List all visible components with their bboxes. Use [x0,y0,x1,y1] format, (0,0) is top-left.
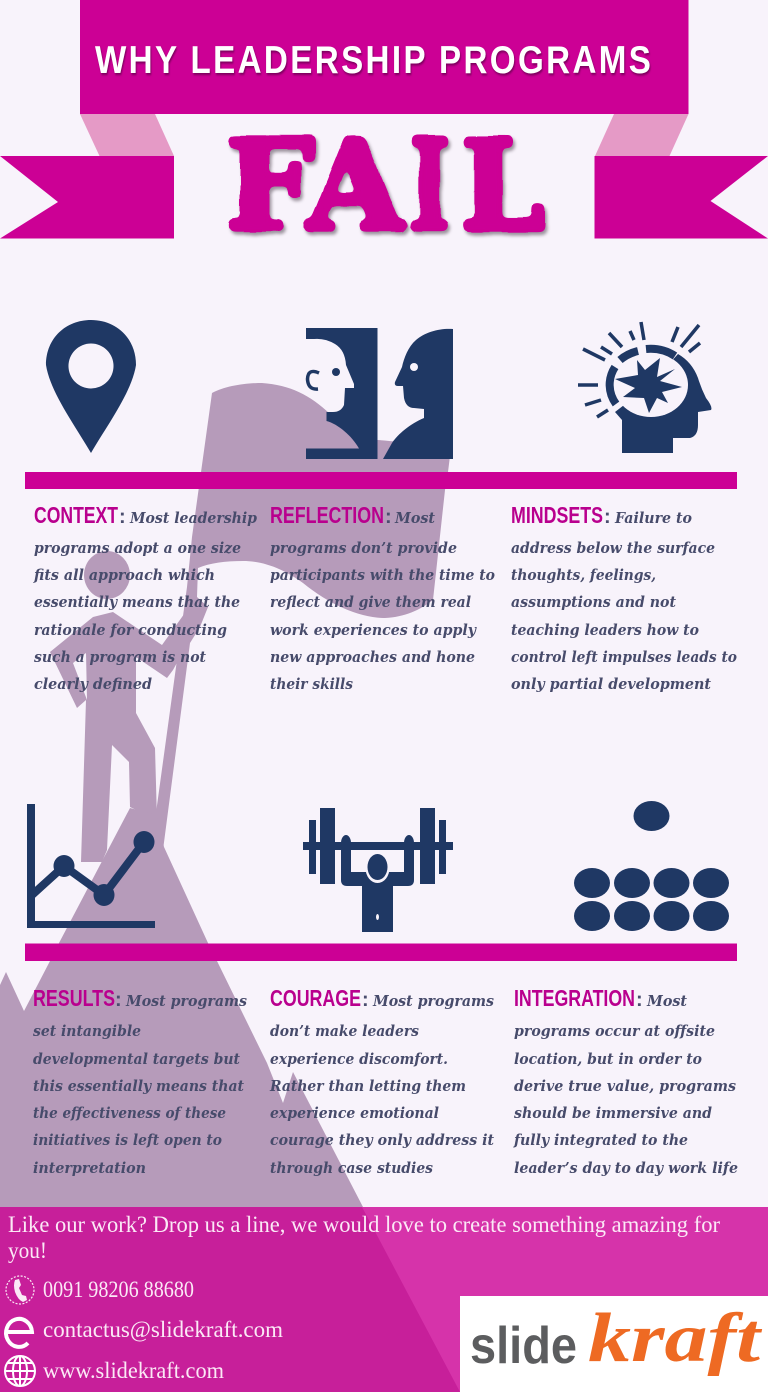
panel: results: Most programs [125,992,248,1010]
panel: integration: programs occur at offsite [514,1022,715,1040]
panel: reflection: work experiences to apply [270,621,477,639]
ribbon: right [594,114,768,238]
panel: courage: courage they only address it [270,1131,494,1149]
panel: mindsets: Failure to [614,509,692,527]
website: www.slidekraft.com [43,1358,224,1383]
panel: mindsets: assumptions and not [511,593,676,611]
divider bar: top [25,472,737,489]
panel: context: fits all approach which [33,566,215,584]
heading: FAIL: L [460,113,545,259]
panel: integration: should be immersive and [514,1104,712,1122]
banner title: WHY LEADERSHIP PROGRAMS [95,37,651,82]
panel: context: rationale for conducting [34,621,227,639]
heading: FAIL [225,113,545,259]
panel: courage: Rather than letting them [269,1077,466,1095]
heading: context: CONTEXT [34,502,118,528]
footer panel [0,1207,768,1392]
heading: FAIL: A [306,113,405,259]
panel: courage: experience emotional [270,1104,439,1122]
panel: reflection: participants with the time to [270,566,495,584]
panel: integration: fully integrated to the [513,1131,688,1149]
panel: integration: : [636,989,643,1011]
panel: mindsets: control left impulses leads to [511,648,737,666]
panel: results: the effectiveness of these [33,1104,226,1122]
panel: context: programs adopt a one size [34,539,241,557]
panel: integration: Most [646,992,687,1010]
panel: mindsets: thoughts, feelings, [511,566,656,584]
panel: courage: Most programs [372,992,495,1010]
icon: email [6,1319,32,1347]
icon: weightlifter [303,808,453,932]
logo: slidekraft: kraft [588,1300,763,1377]
panel: reflection [270,502,495,693]
panel: integration: derive true value, programs [514,1077,737,1095]
panel: mindsets: address below the surface [511,539,715,557]
panel: results: set intangible [33,1022,141,1040]
panel: mindsets: teaching leaders how to [511,621,699,639]
panel: context: clearly defined [34,675,152,693]
footer message: you! [8,1238,47,1263]
panel: results: interpretation [33,1159,146,1177]
panel: integration: leader’s day to day work life [514,1159,738,1177]
icon: two faces [306,328,453,459]
panel: courage [269,985,495,1177]
icon: location pin [46,320,136,453]
footer message [8,1212,720,1263]
panel: integration [513,985,738,1177]
icon: one circle above a group [574,801,729,931]
panel: mindsets [511,502,737,693]
panel: results: this essentially means that [33,1077,244,1095]
panel: reflection: reflect and give them real [270,593,471,611]
panel: context [33,502,257,693]
heading: results: RESULTS [33,985,115,1011]
panel: courage: don’t make leaders [270,1022,420,1040]
panel: reflection: their skills [270,675,353,693]
heading: FAIL: F [225,113,315,259]
heading: FAIL: I [409,113,450,259]
icon: line chart [27,804,155,928]
panel: context: Most leadership [129,509,257,527]
logo: slidekraft [460,1296,768,1392]
panel: courage: experience discomfort. [270,1050,448,1068]
panel: reflection: programs don’t provide [270,539,457,557]
panel: results [33,985,248,1177]
header banner [80,0,688,114]
panel: mindsets: only partial development [511,675,711,693]
heading: reflection: REFLECTION [270,502,384,528]
panel: context: : [119,506,126,528]
heading: integration: INTEGRATION [514,985,635,1011]
panel: courage: through case studies [270,1159,434,1177]
panel: context: essentially means that the [34,593,240,611]
panel: reflection: : [385,506,392,528]
panel: mindsets: : [604,506,611,528]
phone number: 0091 98206 88680 [43,1277,194,1302]
ribbon: left [0,114,174,238]
footer message: Like our work? Drop us a line, we would love to create something amazing for [8,1212,720,1237]
heading: courage: COURAGE [270,985,361,1011]
logo: slidekraft: slide [470,1317,577,1375]
panel: integration: location, but in order to [514,1050,702,1068]
panel: reflection: Most [394,509,435,527]
panel: results: : [115,989,122,1011]
panel: reflection: new approaches and hone [270,648,475,666]
panel: results: developmental targets but [33,1050,240,1068]
background silhouette: flag bearer on mountain [0,383,452,1207]
icon: phone [6,1276,34,1304]
divider bar: bottom [25,944,737,961]
panel: context: such a program is not [34,648,206,666]
icon: globe [5,1356,35,1386]
icon: head with compass star [578,322,711,453]
panel: courage: : [362,989,369,1011]
email address: contactus@slidekraft.com [43,1317,283,1342]
heading: mindsets: MINDSETS [511,502,603,528]
panel: results: initiatives is left open to [33,1131,222,1149]
